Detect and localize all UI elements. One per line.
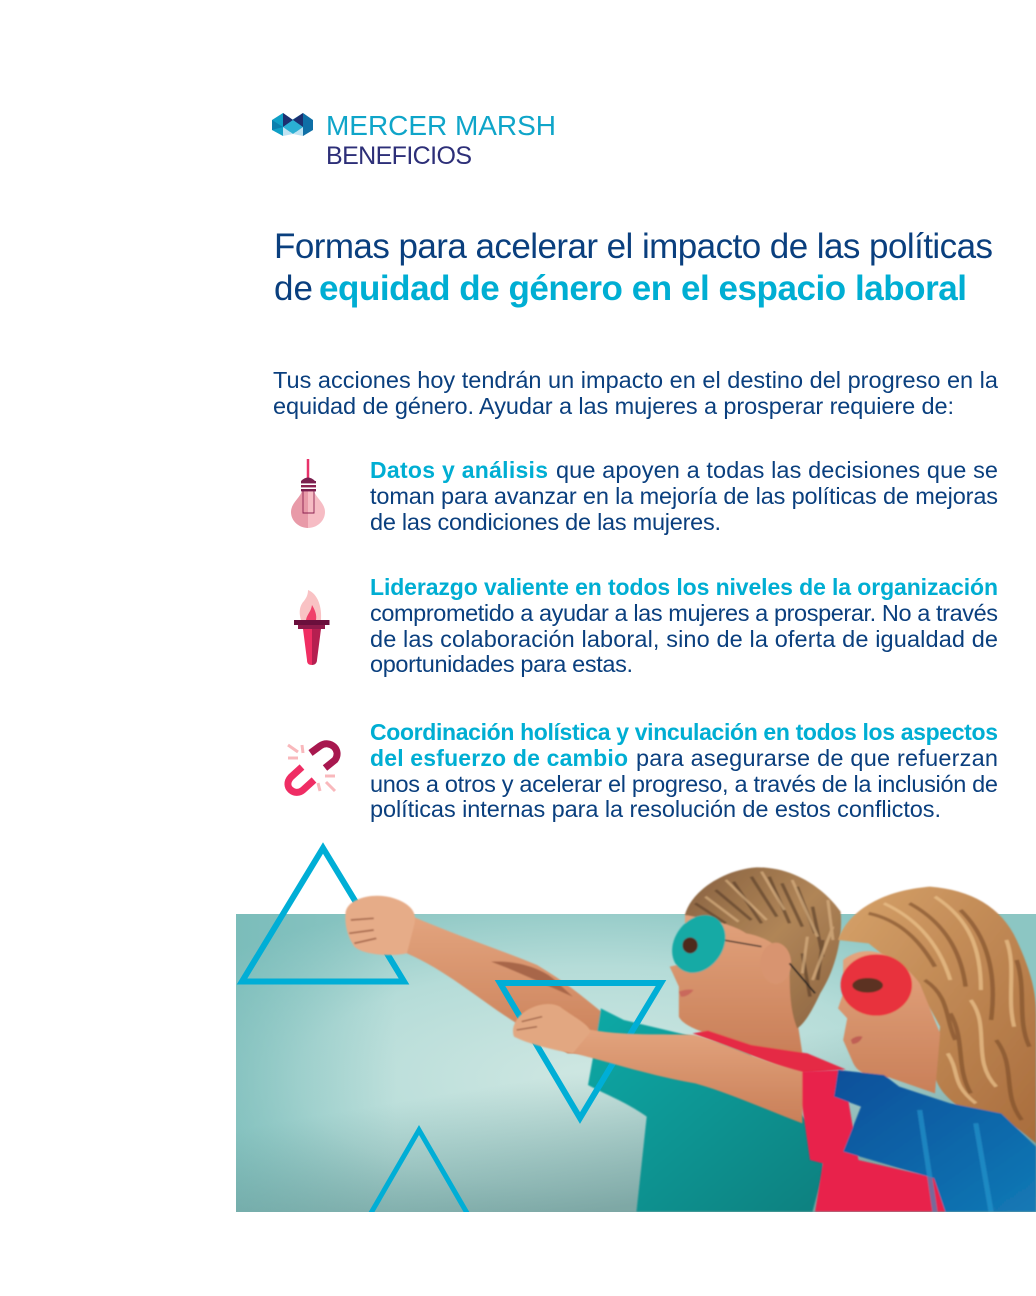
photo panel: children superheroes with triangles xyxy=(236,842,1036,1212)
paragraph: liderazgo valiente: Liderazgo valiente en todos los niveles de la organización xyxy=(370,574,998,600)
paragraph: liderazgo valiente xyxy=(370,574,998,677)
photo: boy xyxy=(345,867,846,1212)
logo: Mercer Marsh Beneficios xyxy=(272,110,556,170)
paragraph: liderazgo valiente: oportunidades para estas. xyxy=(370,651,633,677)
triangle outline: upper left xyxy=(242,848,404,982)
paragraph: coordinación holística: políticas internas para la resolución de estos conflictos. xyxy=(370,796,941,822)
logo text: Mercer Marsh: MERCER MARSH xyxy=(326,110,556,141)
photo background xyxy=(236,914,1036,1212)
intro text xyxy=(273,367,999,419)
title: equidad de género en el espacio laboral xyxy=(319,269,967,308)
paragraph: coordinación holística xyxy=(370,719,998,822)
paragraph: datos y análisis xyxy=(370,457,998,535)
title: Formas para acelerar el impacto de las políticas xyxy=(274,227,993,266)
icon: Mercer Marsh mark xyxy=(272,113,313,136)
icon: torch xyxy=(294,590,330,665)
icon: broken chain link xyxy=(288,744,337,792)
paragraph: coordinación holística: para asegurarse de que refuerzan xyxy=(636,745,998,771)
paragraph: liderazgo valiente: de las colaboración laboral, sino de la oferta de igualdad de xyxy=(370,626,998,652)
paragraph: coordinación holística: unos a otros y acelerar el progreso, a través de la inclusión de xyxy=(370,771,998,797)
intro text: Tus acciones hoy tendrán un impacto en el destino del progreso en la xyxy=(273,367,999,393)
icon: light bulb xyxy=(291,459,325,528)
intro text: equidad de género. Ayudar a las mujeres a prosperar requiere de: xyxy=(273,393,954,419)
triangle outline: bottom xyxy=(368,1125,470,1212)
paragraph: datos y análisis: que apoyen a todas las decisiones que se xyxy=(556,457,998,483)
title: de xyxy=(274,269,313,308)
paragraph: coordinación holística: del esfuerzo de cambio xyxy=(370,745,628,771)
paragraph: coordinación holística: Coordinación holística y vinculación en todos los aspectos xyxy=(370,719,998,745)
paragraph: liderazgo valiente: comprometido a ayudar a las mujeres a prosperar. No a través xyxy=(370,600,998,626)
photo: girl xyxy=(513,887,1036,1212)
paragraph: datos y análisis: toman para avanzar en la mejoría de las políticas de mejoras xyxy=(370,483,998,509)
paragraph: datos y análisis: Datos y análisis xyxy=(370,457,548,483)
title xyxy=(274,227,993,308)
logo text: Beneficios: BENEFICIOS xyxy=(326,142,472,170)
triangle outline: center inverted xyxy=(500,983,661,1118)
paragraph: datos y análisis: de las condiciones de las mujeres. xyxy=(370,509,721,535)
